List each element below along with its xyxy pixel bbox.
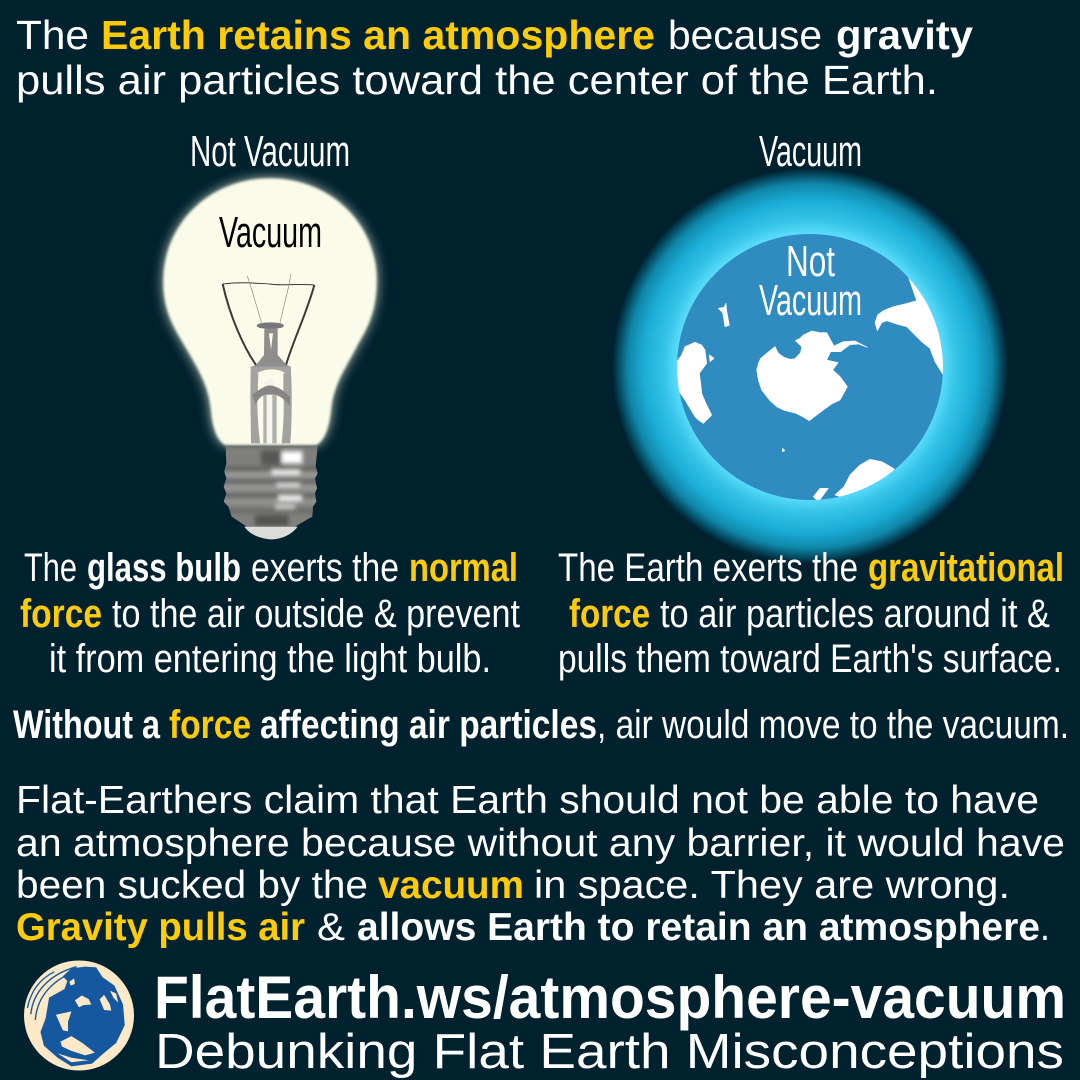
continents [677, 277, 943, 500]
text block: flat-earthers claim: Flat-Earthers claim that Earth should not be able to have [16, 779, 1039, 822]
text block: flat-earthers claim: in space. They are wrong. [534, 864, 1010, 907]
text block: without a force: affecting air particles [260, 703, 597, 747]
text block: glass bulb: it from entering the light bulb. [49, 637, 491, 681]
text block: earth gravity: force [569, 592, 650, 636]
title: The [16, 12, 89, 58]
text block: flat-earthers claim: Gravity pulls air [16, 906, 305, 949]
text block: without a force: Without a [13, 703, 161, 747]
ocean [677, 234, 943, 500]
text block: without a force: force [169, 703, 251, 747]
title: because [668, 12, 822, 58]
earth label: not vacuum [759, 237, 862, 325]
text block: without a force [13, 703, 1069, 747]
text block: glass bulb: normal [409, 546, 518, 590]
text block: flat-earthers claim [16, 779, 1065, 949]
text block: flat-earthers claim: vacuum [378, 864, 524, 907]
text block: flat-earthers claim: an atmosphere because without any barrier, it would have [16, 822, 1065, 865]
glass stem [250, 367, 292, 443]
text block: glass bulb: exerts the [251, 546, 399, 590]
footer: tagline: Debunking Flat Earth Misconceptions [155, 1025, 1064, 1079]
icon: flat earth logo [24, 960, 134, 1070]
label: not vacuum: Not Vacuum [190, 127, 350, 176]
earth label: not vacuum: Vacuum [759, 276, 862, 325]
icon: light bulb [163, 178, 377, 539]
text block: glass bulb: glass bulb [87, 546, 241, 590]
bulb label: vacuum: Vacuum [219, 208, 322, 257]
text block: flat-earthers claim: been sucked by the [16, 864, 368, 907]
filament support [257, 322, 284, 329]
title: gravity [836, 12, 973, 58]
text block: flat-earthers claim: & [317, 906, 345, 949]
label: vacuum: Vacuum [759, 127, 862, 176]
title: pulls air particles toward the center of the Earth. [16, 57, 938, 103]
title [16, 12, 973, 103]
text block: glass bulb: force [20, 592, 102, 636]
text block: earth gravity: The Earth exerts the [558, 546, 858, 590]
icon: earth with atmosphere [612, 168, 1008, 564]
filament wires [223, 273, 314, 365]
screw base [222, 443, 322, 539]
atmosphere glow [612, 168, 1008, 564]
earth label: not vacuum: Not [786, 237, 835, 286]
text block: glass bulb: to the air outside & prevent [112, 592, 520, 636]
text block: flat-earthers claim: . [1040, 906, 1050, 949]
text block: earth gravity [558, 546, 1064, 681]
text block: glass bulb [20, 546, 520, 681]
text block: glass bulb: The [24, 546, 77, 590]
text block: flat-earthers claim: allows Earth to retain an atmosphere [357, 906, 1040, 949]
title: Earth retains an atmosphere [101, 12, 655, 58]
